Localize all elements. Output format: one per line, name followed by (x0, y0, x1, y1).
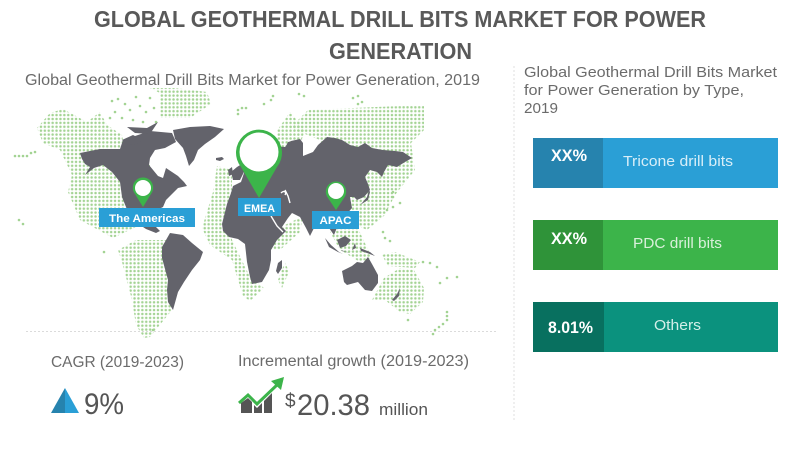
scattered island dots (14, 93, 458, 335)
Great Britain (228, 167, 233, 176)
South America (162, 233, 203, 310)
icon: blue triangle (51, 388, 79, 413)
Red Sea, Black Sea and Caspian details (271, 190, 290, 232)
bar: Tricone drill bits: XX% (551, 146, 587, 165)
bar: Others: Others (654, 317, 701, 334)
CAGR stat (51, 354, 184, 421)
pin: EMEA: EMEA (244, 203, 275, 215)
bar: Others: 8.01% (548, 318, 593, 337)
title (94, 6, 706, 64)
bar: Tricone drill bits: Tricone drill bits (623, 153, 733, 170)
CAGR stat: 9% (84, 388, 124, 421)
bar: PDC drill bits (533, 220, 778, 270)
Southeast Asia islands (325, 238, 343, 254)
Eurasia and Africa (222, 137, 412, 284)
type heading: 2019 (524, 100, 558, 117)
bar: PDC drill bits: XX% (551, 229, 587, 248)
pin: EMEA (236, 130, 282, 216)
title: GLOBAL GEOTHERMAL DRILL BITS MARKET FOR POWER (94, 6, 706, 32)
Australia (342, 257, 378, 291)
incremental growth stat: million (379, 400, 428, 419)
bar: PDC drill bits: PDC drill bits (633, 235, 722, 252)
bar: Others (533, 302, 778, 352)
incremental growth stat: Incremental growth (2019-2023) (238, 353, 469, 370)
dark land masses (80, 122, 412, 310)
incremental growth stat: $ (285, 391, 296, 412)
type heading: for Power Generation by Type, (524, 82, 744, 99)
New Zealand (392, 288, 400, 301)
incremental growth stat (238, 353, 469, 422)
title: GENERATION (329, 38, 472, 64)
CAGR stat: CAGR (2019-2023) (51, 354, 184, 371)
Madagascar (276, 260, 282, 274)
pin: APAC (312, 181, 359, 229)
pin: The Americas (99, 177, 195, 227)
Iceland (216, 157, 224, 161)
world map (14, 88, 458, 338)
map heading: Global Geothermal Drill Bits Market for Power Generation, 2019 (25, 72, 480, 89)
Arctic islands (122, 135, 143, 145)
dotted ocean and land background (37, 88, 424, 338)
type heading (524, 64, 778, 117)
Japan (360, 190, 370, 205)
type heading: Global Geothermal Drill Bits Market (524, 64, 778, 81)
icon: growth chart arrow (239, 377, 284, 413)
bar: Tricone drill bits (533, 138, 778, 188)
pin: APAC: APAC (320, 215, 352, 227)
pin: The Americas: The Americas (109, 213, 185, 225)
Greenland (173, 126, 224, 166)
North America (80, 131, 187, 233)
incremental growth stat: 20.38 (297, 389, 370, 422)
